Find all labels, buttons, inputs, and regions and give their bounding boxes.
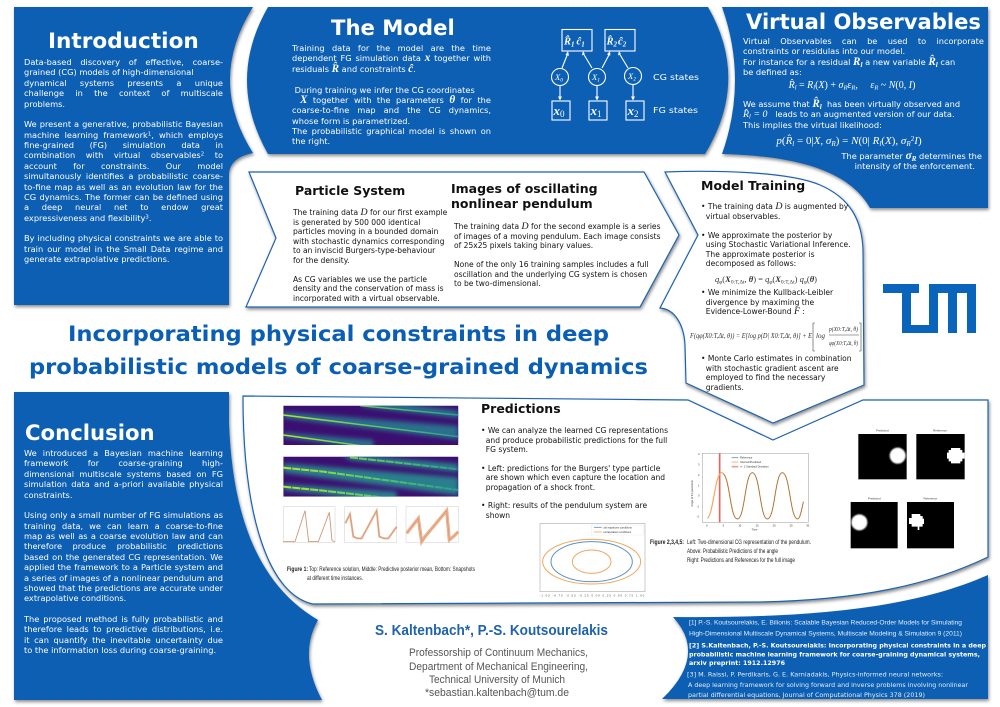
probabilistic graphical model diagram: 1 — [597, 78, 600, 84]
probabilistic graphical model diagram: x — [590, 103, 597, 118]
figure 3: angle prediction plot: 25 — [790, 524, 793, 528]
snapshot plots — [283, 507, 458, 542]
figure 3: angle prediction plot: Time — [752, 528, 758, 532]
model text: whose form is parametrized. — [292, 116, 410, 126]
model text: dependent FG simulation data x together with — [292, 52, 491, 64]
conclusion panel shape — [12, 392, 324, 704]
bullets: data and variational inference: using Stochastic Variational Inference. — [706, 240, 851, 249]
figure 3: angle prediction plot: 20 — [773, 524, 776, 528]
equation: evidence lower bound: F(qφ(X0:T,Δt, θ)) = E[log p(D| X0:T,Δt, θ)] + E — [689, 331, 812, 340]
affiliation — [409, 647, 588, 699]
model text — [292, 43, 491, 146]
panel: the model — [246, 6, 732, 158]
figure 3: angle prediction plot: 30 — [806, 524, 810, 528]
figure 2: phase portrait — [539, 523, 646, 598]
conclusion text: dimensional multiscale systems based on FG — [24, 469, 223, 479]
panel: model training — [658, 170, 868, 428]
pendulum text: None of the only 16 training samples includes a full — [454, 260, 649, 269]
equation: evidence lower bound — [689, 322, 862, 352]
enforcement note: The parameter σR determines the — [841, 150, 982, 163]
bullets: data and variational inference: • The training data D is augmented by — [701, 201, 848, 212]
figures 2-5 caption: Right: Predictions and References for the full image — [687, 557, 795, 564]
virtual likelihood text: We assume that R̂l has been virtually observed and — [743, 98, 960, 111]
model training panel shape — [658, 170, 868, 428]
reference 2: [2] S.Kaltenbach, P.-S. Koutsourelakis: Incorporating physical constraints in a deep — [689, 642, 986, 650]
predictions text: FG system. — [486, 445, 528, 454]
reference 2: probabilistic machine learning framework for coarse-graining dynamical systems, — [689, 650, 980, 658]
probabilistic graphical model diagram: FG states — [653, 105, 698, 115]
heading: Model Training: Model Training — [701, 178, 805, 193]
probabilistic graphical model diagram: 0 — [560, 109, 565, 119]
particle system text — [292, 207, 447, 303]
figure 3: angle prediction plot: 0 — [706, 524, 708, 528]
figure 3: angle prediction plot: 1 — [698, 483, 700, 487]
figure 1 caption: at different time instances. — [307, 575, 363, 582]
probabilistic graphical model diagram: ĉ — [618, 36, 623, 48]
figure 3: angle prediction plot: -1 — [697, 504, 700, 508]
introduction text: train our model in the Small Data regime and — [24, 244, 223, 254]
conclusion text: it can quantify the inevitable uncertainty due — [24, 635, 223, 645]
figures 4 and 5: predicted and reference pendulum images: Reference — [923, 497, 938, 501]
virtual observables intro text: constraints or residulas into our model. — [743, 46, 905, 56]
panel: predictions — [241, 395, 992, 609]
equation: evidence lower bound: log — [816, 332, 825, 340]
figure 3: angle prediction plot: 2 — [698, 473, 700, 477]
particle system text: density and the conservation of mass is — [293, 284, 444, 293]
conclusion text: Using only a small number of FG simulations as — [24, 510, 223, 520]
figure 1 caption — [287, 566, 476, 582]
virtual observables panel shape — [722, 6, 992, 212]
figure 3: angle prediction plot: 5 — [723, 524, 725, 528]
particle system text: incorporated with a virtual observable. — [293, 294, 440, 303]
reference 3: partial differential equations, Journal of Computational Physics 378 (2019) — [688, 693, 925, 699]
title: probabilistic models of coarse-grained dynamics — [29, 355, 648, 380]
introduction text: expressiveness and flexibility3. — [24, 213, 151, 223]
equation: evidence lower bound: p(X0:T,Δt, θ) — [828, 326, 858, 333]
bullet: monte carlo: gradients. — [706, 383, 744, 392]
conclusion text: based on the generated CG representation. We — [24, 552, 223, 562]
pendulum text: of 25x25 pixels taking binary values. — [454, 241, 593, 250]
particle system text: for the density. — [293, 256, 350, 265]
probabilistic graphical model diagram: 2 — [633, 76, 636, 82]
predictions text: • Right: results of the pendulum system are — [481, 501, 647, 510]
probabilistic graphical model diagram: 0 — [560, 78, 563, 84]
conclusion text: therefore produce probabilistic predictions — [24, 541, 223, 551]
figures 4 and 5: predicted and reference pendulum images: Predicted — [868, 497, 881, 501]
pendulum text: of images of a moving pendulum. Each image consists — [454, 232, 661, 241]
heading: Predictions: Predictions — [481, 401, 561, 416]
affiliation: Professorship of Continuum Mechanics, — [409, 647, 588, 659]
panel: introduction — [12, 6, 256, 310]
conclusion text: framework for coarse-graining high- — [24, 458, 223, 468]
probabilistic graphical model diagram: ĉ — [577, 36, 582, 48]
predictions panel shape — [241, 395, 992, 609]
model text: Training data for the model are the time — [292, 43, 491, 53]
chevron panel shape — [244, 171, 682, 312]
predictions text: propagation of a shock front. — [486, 483, 595, 492]
probabilistic graphical model diagram: x — [554, 103, 560, 118]
conclusion text: We introduced a Bayesian machine learning — [24, 448, 223, 458]
predictions text: shown — [486, 511, 510, 520]
figures 2-5 caption: Figure 2,3,4,5: — [650, 539, 684, 546]
conclusion text: applied the framework to a Particle system and — [24, 562, 223, 572]
figures 2-5 caption: Above: Probabilistic Predictions of the angle — [687, 548, 778, 555]
introduction text: simultanously identifies a probabilistic coarse- — [24, 171, 223, 181]
author block — [375, 623, 608, 699]
figure 3: angle prediction plot: Inferred/Predicted — [740, 460, 762, 464]
conclusion text — [24, 448, 224, 655]
probabilistic graphical model diagram: X — [592, 72, 597, 82]
equation: virtual likelihood: p(R̂l = 0|X, σR) = N(0| Rl(X), σR2I) — [776, 135, 922, 148]
probabilistic graphical model diagram: X — [555, 72, 560, 82]
figure 3: angle prediction plot: 4 — [698, 452, 700, 456]
heading: Introduction: Introduction — [48, 29, 199, 54]
predictions text: and produce probabilistic predictions for the full — [486, 436, 667, 445]
figure 3: angle prediction plot: 15 — [756, 524, 759, 528]
figure 3: angle prediction plot: Angle of the pendulum — [690, 479, 694, 507]
equation: evidence lower bound: qφ(X0:T,Δt, θ) — [829, 340, 858, 347]
equation: approximate posterior: qφ(X0:T,Δt, θ) = qφ(X0:T,Δt) qφ(θ) — [715, 274, 817, 285]
virtual likelihood text: R̂l = 0 leads to an augmented version of our data. — [743, 109, 955, 121]
introduction text: combination with virtual observables2 to — [24, 150, 223, 160]
affiliation: Technical University of Munich — [429, 674, 565, 686]
probabilistic graphical model diagram: 1 — [571, 40, 575, 48]
predictions text: are shown which even capture the location and — [486, 473, 665, 482]
introduction text: problems. — [24, 98, 65, 108]
conclusion text: map as well as a coarse evolution law and can — [24, 531, 223, 541]
virtual likelihood text: This implies the virtual likelihood: — [743, 120, 882, 130]
probabilistic graphical model diagram: 2 — [613, 40, 618, 48]
title: Incorporating physical constraints in deep — [68, 322, 609, 347]
introduction text — [24, 57, 223, 264]
figures 4 and 5: predicted and reference pendulum images — [850, 429, 965, 548]
probabilistic graphical model diagram: 2 — [634, 109, 638, 119]
conclusion text: constraints. — [24, 490, 72, 500]
model text: During training we infer the CG coordinates — [295, 84, 475, 94]
panel: conclusion — [12, 392, 324, 704]
introduction text: fine-grained (FG) simulation data in — [24, 140, 223, 150]
figure 2: phase portrait: extrapolation conditions — [603, 530, 632, 534]
particle system text: The training data D for our first example — [293, 207, 447, 218]
figure 3: angle prediction plot: 0 — [698, 494, 700, 498]
introduction text: CG dynamics. The former can be defined using — [24, 192, 223, 202]
heatmap: reference solution — [283, 406, 458, 445]
heading: The Model: The Model — [331, 15, 455, 40]
virtual observables intro text: Virtual Observables can be used to incorporate — [743, 36, 984, 46]
figure 1 caption: Top: Reference solution, Middle: Predictive posterior mean, Bottom: Snapshots — [309, 566, 476, 573]
bullet: kullback-leibler: • We minimize the Kullback-Leibler — [701, 288, 833, 297]
conclusion text: a series of images of a nonlinear pendulum and — [24, 572, 223, 582]
conclusion text: simulation data and a-priori available physical — [24, 479, 223, 489]
bullet: monte carlo: • Monte Carlo estimates in combination — [701, 354, 852, 363]
figures 4 and 5: predicted and reference pendulum images: Reference — [933, 429, 947, 433]
introduction text: By including physical constraints we are able to — [24, 233, 223, 243]
particle system text: As CG variables we use the particle — [293, 275, 427, 284]
bullet: kullback-leibler: divergence by maximing the — [706, 298, 814, 307]
model panel shape — [246, 6, 732, 158]
introduction text: generate extrapolative predictions. — [24, 254, 170, 264]
reference 2: arxiv preprint: 1912.12976 — [689, 659, 786, 667]
probabilistic graphical model diagram: 1 — [597, 109, 602, 119]
figure 3: angle prediction plot: +/- 2 Standard Deviation — [740, 465, 769, 469]
conclusion text: to the information loss during coarse-graining. — [24, 645, 216, 655]
reference 1 — [689, 620, 962, 638]
enforcement note: intensity of the enforcement. — [855, 161, 975, 171]
model text: The probabilistic graphical model is shown on — [292, 126, 491, 136]
reference 3: [3] M. Raissi, P. Perdikaris, G. E. Karniadakis, Physics-informed neural networks: — [687, 672, 943, 678]
figures 2-5 caption — [650, 539, 811, 564]
authors: S. Kaltenbach*, P.-S. Koutsourelakis — [375, 623, 608, 639]
reference 3 — [687, 672, 969, 699]
affiliation: *sebastian.kaltenbach@tum.de — [425, 687, 569, 699]
figure 2: phase portrait: -1.00 -0.75 -0.50 -0.25 0.00 0.25 0.50 0.75 1.00 — [539, 594, 645, 598]
predictions text: • Left: predictions for the Burgers' type particle — [481, 464, 660, 473]
bullet: monte carlo: employed to find the necessary — [706, 373, 825, 382]
probabilistic graphical model diagram: x — [628, 103, 634, 118]
model text: X together with the parameters θ for the — [300, 94, 491, 106]
pendulum text: The training data D for the second example is a series — [454, 221, 661, 232]
virtual observables intro text — [743, 36, 984, 77]
introduction text: dynamical systems presents a unique — [24, 78, 223, 88]
figure 1: burgers predictions — [283, 406, 476, 582]
bullets: data and variational inference: • We approximate the posterior by — [701, 231, 832, 240]
pendulum text: oscillation and the underlying CG system is chosen — [454, 270, 647, 279]
introduction text: account for constraints. Our model — [24, 161, 223, 171]
figure 3: angle prediction plot: 10 — [738, 524, 742, 528]
reference 1: [1] P.-S. Koutsourelakis, E. Bilionis: Scalable Bayesian Reduced-Order Models for Simulating — [689, 620, 962, 626]
introduction text: grained (CG) models of high-dimensional — [24, 67, 194, 77]
model text: the right. — [292, 136, 330, 146]
bullet: monte carlo: with stochastic gradient ascent are — [706, 364, 839, 373]
probabilistic graphical model diagram: X — [628, 71, 633, 81]
conclusion text: extrapolative conditions. — [24, 593, 126, 603]
probabilistic graphical model diagram: 2 — [622, 40, 627, 48]
heading: Images of oscillating nonlinear pendulum: nonlinear pendulum — [451, 196, 593, 211]
heading: Conclusion: Conclusion — [25, 420, 155, 445]
enforcement note — [841, 150, 982, 171]
reference 1: High-Dimensional Multiscale Dynamical Systems, Multiscale Modeling & Simulation 9 (2011) — [689, 630, 962, 638]
particle system text: with stochastic dynamics corresponding — [293, 237, 445, 246]
figures 4 and 5: predicted and reference pendulum images: Predicted — [876, 429, 889, 433]
heading: Particle System: Particle System — [295, 183, 405, 198]
particle system text: to an inviscid Burgers-type-behaviour — [293, 246, 435, 255]
pendulum text — [454, 221, 661, 288]
introduction text: Data-based discovery of effective, coarse- — [24, 57, 223, 67]
introduction panel shape — [12, 6, 256, 310]
bullet: kullback-leibler: Evidence-Lower-Bound F : — [706, 306, 805, 317]
reference 2 — [689, 642, 986, 667]
probabilistic graphical model diagram: CG states — [653, 72, 699, 82]
bullets: data and variational inference: decomposed as follows: — [706, 259, 796, 268]
figure 3: angle prediction plot — [690, 452, 810, 532]
bullets: data and variational inference: virtual observables. — [706, 212, 780, 221]
introduction text: a deep neural net to endow great — [24, 202, 223, 212]
introduction text: We present a generative, probabilistic Bayesian — [24, 119, 223, 129]
reference 3: A deep learning framework for solving forward and inverse problems involving nonlinear — [688, 683, 969, 689]
conclusion text: training data, we can learn a coarse-to-fine — [24, 521, 223, 531]
probabilistic graphical model diagram: R̂ — [606, 36, 614, 48]
introduction text: machine learning framework1, which employs — [24, 130, 223, 140]
affiliation: Department of Mechanical Engineering, — [409, 661, 588, 673]
probabilistic graphical model diagram — [550, 28, 699, 121]
figures 2-5 caption: Left: Two-dimensional CG representation of the pendulum. — [687, 539, 811, 546]
probabilistic graphical model diagram: R̂ — [564, 36, 571, 48]
conclusion text: The proposed method is fully probabilistic and — [24, 614, 223, 624]
introduction text: challenge in the context of multiscale — [24, 88, 223, 98]
virtual observables intro text: For instance for a residual Rl a new variable R̂l can — [743, 56, 955, 69]
figure 2: phase portrait: old equations conditions — [603, 525, 633, 529]
bullet: kullback-leibler — [701, 288, 834, 317]
figure 1 caption: Figure 1: — [287, 566, 308, 573]
model text: residuals R̂ and constraints ĉ. — [292, 63, 416, 75]
conclusion text: showed that the predictions are accurate under — [24, 583, 223, 593]
conclusion text: therefore leads to predictive distributions, i.e. — [24, 624, 223, 634]
virtual likelihood text — [742, 96, 960, 130]
heading: Images of oscillating nonlinear pendulum — [451, 181, 598, 211]
bullets: data and variational inference: The approximate posterior is — [706, 250, 815, 259]
probabilistic graphical model diagram: 1 — [581, 40, 585, 48]
model text: coarse-to-fine map and the CG dynamics, — [292, 105, 491, 115]
particle system text: particles moving in a bounded domain — [293, 227, 438, 236]
equation: virtual observable definition: R̂l = Rl(X) + σRεR, εR ~ N(0, I) — [789, 80, 915, 92]
TUM logo — [883, 284, 976, 333]
virtual observables intro text: be defined as: — [743, 67, 802, 77]
bullet: monte carlo — [701, 354, 852, 392]
figure 3: angle prediction plot: -2 — [697, 515, 700, 519]
bullets: data and variational inference — [701, 201, 851, 268]
figure 3: angle prediction plot: 3 — [698, 462, 700, 466]
figure 3: angle prediction plot: Reference — [740, 456, 753, 460]
panel: virtual observables — [722, 6, 992, 212]
heatmap: predictive posterior mean — [283, 456, 458, 497]
heading: Virtual Observables: Virtual Observables — [746, 9, 981, 34]
pendulum text: to be two-dimensional. — [454, 279, 541, 288]
predictions text — [481, 426, 668, 520]
title — [29, 322, 648, 380]
panel: particle system and pendulum — [244, 171, 682, 312]
particle system text: is generated by 500 000 identical — [293, 218, 420, 227]
heading: Images of oscillating nonlinear pendulum: Images of oscillating — [451, 181, 598, 196]
panel: references — [662, 575, 992, 704]
predictions text: • We can analyze the learned CG representations — [481, 426, 668, 435]
introduction text: to-fine map as well as an evolution law for the — [24, 182, 223, 192]
